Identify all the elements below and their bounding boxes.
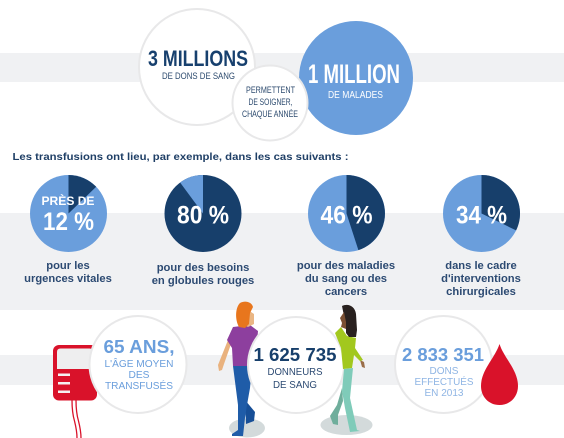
icon: blood bag bbox=[53, 345, 97, 438]
circle: 1 625 735 donneurs bbox=[248, 317, 344, 413]
pie caption 3: du sang ou des bbox=[305, 273, 387, 285]
pie: 46%: 46 % bbox=[320, 202, 372, 230]
circle: 2 833 351 dons: 2 833 351 bbox=[402, 344, 484, 365]
circle: 65 ans: DES bbox=[128, 370, 150, 381]
circle: 65 ans bbox=[90, 316, 186, 413]
circle: 2 833 351 dons: EN 2013 bbox=[424, 388, 464, 399]
circle: 3 millions de dons de sang bbox=[139, 9, 255, 125]
circle: 65 ans: 65 ANS, bbox=[104, 337, 174, 357]
pie caption 2 bbox=[152, 262, 254, 287]
icon: blood drop bbox=[481, 344, 518, 405]
circle: permettent de soigner: PERMETTENT bbox=[246, 85, 295, 96]
circle: 65 ans: TRANSFUSÉS bbox=[105, 379, 173, 392]
circle: permettent de soigner: DE SOIGNER, bbox=[248, 97, 292, 108]
heading: Les transfusions ont lieu, par exemple, dans les cas suivants : bbox=[12, 151, 348, 163]
pie caption 4: d'interventions bbox=[441, 273, 521, 285]
circle: 65 ans: L'ÂGE MOYEN bbox=[104, 357, 174, 370]
circle: 3 millions de dons de sang: 3 MILLIONS bbox=[148, 46, 248, 71]
circle: 2 833 351 dons bbox=[395, 316, 492, 413]
pie: pres de 12%: PRÈS DE bbox=[42, 195, 95, 208]
circle: 1 million de malades bbox=[299, 21, 413, 135]
pie: pres de 12% bbox=[30, 175, 107, 252]
pie: 80%: 80 % bbox=[177, 202, 229, 230]
circle: 1 million de malades: 1 MILLION bbox=[308, 59, 400, 89]
pie: 80% bbox=[164, 175, 242, 252]
figure: man walking bbox=[218, 302, 265, 438]
circle: 1 million de malades: DE MALADES bbox=[328, 90, 383, 101]
circle: 2 833 351 dons: EFFECTUÉS bbox=[414, 375, 474, 388]
pie: 34% bbox=[443, 175, 520, 252]
circle: 1 625 735 donneurs: DONNEURS bbox=[268, 367, 323, 378]
circle: permettent de soigner bbox=[232, 66, 308, 140]
pie caption 1: urgences vitales bbox=[24, 273, 112, 285]
pie: pres de 12%: 12 % bbox=[43, 208, 94, 236]
circle: 2 833 351 dons: DONS bbox=[430, 366, 459, 377]
pie: 46% bbox=[308, 175, 385, 252]
pie caption 2: pour des besoins bbox=[157, 262, 249, 274]
figure: woman walking bbox=[320, 305, 372, 435]
circle: 3 millions de dons de sang: DE DONS DE SANG bbox=[162, 71, 235, 82]
pie: 34%: 34 % bbox=[456, 202, 507, 230]
pie caption 4: chirurgicales bbox=[446, 286, 516, 298]
pie caption 3: cancers bbox=[325, 286, 367, 298]
pie caption 1 bbox=[24, 260, 112, 285]
pie caption 3 bbox=[297, 260, 395, 298]
pie caption 4 bbox=[441, 260, 521, 298]
circle: 1 625 735 donneurs: DE SANG bbox=[273, 380, 317, 391]
circle: permettent de soigner: CHAQUE ANNÉE bbox=[242, 109, 298, 120]
pie caption 3: pour des maladies bbox=[297, 260, 395, 272]
pie caption 4: dans le cadre bbox=[445, 260, 517, 272]
pie caption 2: en globules rouges bbox=[152, 275, 254, 287]
pie caption 1: pour les bbox=[46, 260, 90, 272]
circle: 1 625 735 donneurs: 1 625 735 bbox=[254, 345, 336, 365]
